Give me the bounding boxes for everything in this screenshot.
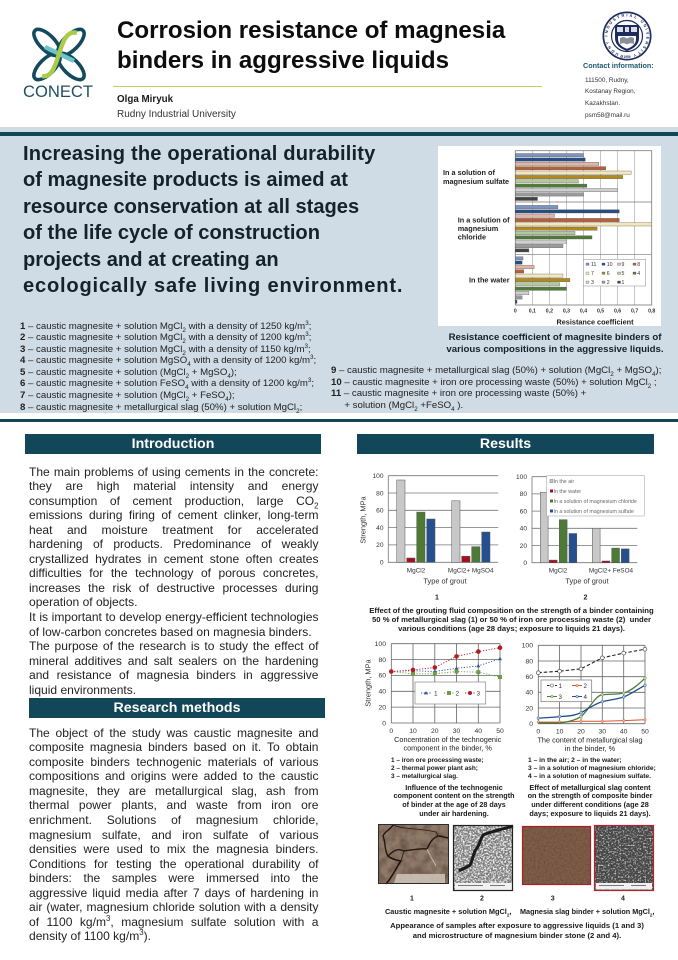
text: research methods: composite binders technogenic materials of various — [29, 755, 318, 769]
text: introduction: mineral additives and salt sealers on the hardening — [29, 654, 318, 668]
composition list 9-11 — [331, 365, 661, 413]
bars: magnesium chloride — [515, 205, 652, 252]
legend — [541, 680, 592, 702]
photo numbers: 3 — [551, 896, 555, 902]
chart legend: 10 — [607, 262, 613, 268]
legend: 2 — [456, 690, 460, 697]
resistance chart caption: Resistance coefficient of magnesite binders of — [449, 332, 661, 343]
text: introduction: heat and moisture treatment for accelerated — [29, 523, 318, 537]
author: Olga Miryuk — [117, 94, 173, 105]
photo 3: slag binder sample — [522, 826, 591, 885]
key statement: projects and at creating an — [23, 249, 279, 271]
chart legend: 3 — [591, 280, 594, 286]
caption: metallurgical slag: days; exposure to liquids 21 days). — [529, 809, 651, 818]
text: introduction: increases the risk of destructive processes during — [29, 581, 318, 595]
chart category labels: magnesium — [458, 224, 499, 233]
legend text: technogenic components — [391, 757, 484, 780]
text: introduction: difficulties for the technology of porous concretes, — [29, 566, 318, 580]
key statement: of the life cycle of construction — [23, 222, 320, 244]
text: introduction: they are high material intensity and energy — [29, 479, 318, 493]
text: introduction: The purpose of the research is to study the effect of — [29, 639, 318, 653]
heading: research methods — [29, 698, 325, 718]
caption: grouting fluid charts: various conditions (age 28 days; exposure to liquids 21 days). — [398, 624, 625, 633]
text: introduction: operation of objects. — [29, 595, 138, 609]
caption: grouting fluid charts: Effect of the grouting fluid composition on the strength of a binder containing — [369, 606, 654, 614]
chart category labels: In the water — [469, 276, 510, 284]
axis labels: 40 — [525, 690, 533, 697]
chart 4: metallurgical slag line chart: 0 — [536, 728, 540, 736]
axis labels: 20 — [376, 542, 384, 549]
text: introduction: of low-carbon concretes based on magnesia binders. — [29, 625, 312, 639]
axis labels: 80 — [520, 491, 527, 498]
panel: resistance coefficient chart — [438, 146, 661, 326]
title underline — [113, 86, 542, 87]
chart 1: strength by grout, slag binder: MgCl2 — [407, 568, 426, 574]
caption: metallurgical slag: on the strength of composite binder — [528, 791, 652, 800]
chart 4: metallurgical slag line chart: The content of metallurgical slag — [537, 736, 643, 744]
chart legend: 9 — [622, 262, 624, 268]
heading: research methods: Research methods — [114, 700, 240, 716]
chart 4: metallurgical slag line chart: 50 — [641, 728, 649, 736]
key statement: resource conservation at all stages — [23, 196, 359, 218]
legend text: conditions: 3 – in a solution of magnesium chloride; — [528, 765, 656, 772]
text: introduction — [29, 464, 318, 697]
chart 4: metallurgical slag line chart: in the binder, % — [565, 744, 616, 753]
title: Corrosion resistance of magnesia — [117, 17, 505, 44]
text: research methods: Conditions for testing the operational durability of — [29, 857, 318, 871]
caption: grouting fluid charts: 50 % of metallurgical slag (1) or 50 % of iron ore processing waste (2) under — [372, 615, 651, 624]
photo numbers: 1 — [410, 896, 414, 902]
axis labels — [522, 643, 533, 728]
text: research methods: aggressive liquid media after 7 days of hardening in — [29, 886, 318, 900]
axis labels: 0 — [380, 560, 384, 567]
chart 2: strength by grout, waste binder: MgCl2+ FeSO4 — [589, 568, 634, 574]
key statement: ecologically safe living environment. — [23, 275, 403, 297]
axis labels: 20 — [378, 704, 386, 711]
caption: metallurgical slag: under different conditions (age 28 — [531, 800, 649, 809]
photo numbers: 4 — [621, 896, 625, 902]
legend: 1 — [558, 683, 562, 690]
axis labels: 60 — [378, 673, 386, 680]
axis labels: 40 — [376, 525, 384, 532]
resistance chart caption — [446, 332, 664, 355]
legend: In a solution of magnesium sulfate — [554, 509, 634, 515]
composition list 9-11: 10 – caustic magnesite + iron ore processing waste (50%) + solution MgCl2 ; — [331, 377, 657, 390]
series 4: magnesium sulfate — [537, 684, 646, 720]
legend: 1 — [434, 690, 438, 697]
legend: In the water — [554, 489, 581, 495]
chart category labels: magnesium sulfate — [443, 177, 509, 186]
chart 3: technogenic component line chart: 30 — [453, 728, 460, 735]
axis labels: 20 — [520, 543, 527, 550]
axis labels: 0 — [382, 720, 386, 727]
chart x axis: 0,3 — [563, 308, 570, 314]
chart 3: technogenic component line chart: Concentration of the technogenic — [394, 735, 502, 744]
affiliation: Rudny Industrial University — [117, 109, 236, 120]
chart x axis title: Resistance coefficient — [556, 318, 634, 326]
text: research methods: enrichment. Solutions of magnesium chloride, — [29, 813, 318, 827]
series 1: iron ore waste — [391, 657, 502, 673]
axis labels: 80 — [376, 490, 384, 497]
contact heading: Contact information: — [583, 61, 654, 70]
chart 4: metallurgical slag line chart — [522, 643, 649, 753]
heading: results: Results — [480, 436, 531, 452]
photo labels: Caustic magnesite + solution MgCl2, — [385, 907, 512, 918]
chart legend: 6 — [607, 271, 610, 277]
key statement: Increasing the operational durability — [23, 143, 375, 165]
axis labels: 60 — [376, 508, 384, 515]
text: research methods: of 1100 kg/m3, magnesium sulfate solution with a — [29, 914, 318, 929]
axis labels: 60 — [520, 508, 527, 515]
chart x axis — [514, 308, 655, 314]
composition list 1-8: 8 – caustic magnesite + metallurgical slag (50%) + solution MgCl2; — [20, 402, 302, 415]
chart 1: strength by grout, slag binder: MgCl2+ MgSO4 — [448, 568, 494, 574]
legend text: conditions: 1 – in the air; 2 – in the water; — [528, 757, 622, 764]
legend: 3 — [476, 690, 480, 697]
axis labels — [372, 473, 384, 567]
axis labels: 0 — [529, 721, 533, 728]
contact details: 111500, Rudny, — [585, 76, 629, 84]
chart 1: strength by grout, slag binder: 1 — [435, 594, 439, 602]
chart 2: strength by grout, waste binder: MgCl2 — [549, 568, 568, 574]
text: introduction: hardening of products. Predominance of weakly — [29, 537, 318, 551]
chart legend — [583, 259, 646, 286]
text: introduction: crystallized hydrates in cement stone often creates — [29, 552, 318, 566]
icon: university seal: 1959 — [623, 55, 631, 59]
bars — [397, 480, 490, 562]
composition list 1-8: 2 – caustic magnesite + solution MgCl2 with a density of 1200 kg/m3; — [20, 331, 311, 345]
title: binders in aggressive liquids — [117, 46, 449, 74]
text: research methods: binders: the samples were immersed into the — [29, 871, 318, 885]
text: research methods: density of 1100 kg/m3). — [29, 928, 151, 943]
legend text: conditions: 4 – in a solution of magnesium sulfate. — [528, 773, 651, 780]
text: research methods: The object of the study was caustic magnesite and — [29, 726, 318, 740]
text: introduction: and resistance of magnesia binders in aggressive — [29, 668, 318, 682]
chart legend: 11 — [591, 262, 596, 268]
heading: introduction — [25, 434, 321, 454]
composition list 1-8: 3 – caustic magnesite + solution MgCl2 with a density of 1150 kg/m3; — [20, 342, 311, 357]
chart 3: technogenic component line chart: 0 — [389, 728, 393, 735]
series 3: slag — [389, 645, 502, 674]
chart 2: strength by grout, waste binder: 2 — [584, 594, 588, 602]
chart legend: 4 — [637, 271, 640, 277]
legend: In the air — [554, 479, 574, 485]
photo 1: cracked sample — [378, 824, 449, 884]
chart category labels: In a solution of — [443, 168, 495, 177]
legend — [415, 682, 486, 704]
chart 4: metallurgical slag line chart: 40 — [620, 728, 628, 736]
chart 3: technogenic component line chart: component in the binder, % — [403, 744, 492, 753]
resistance chart caption: various compositions in the aggressive liquids. — [446, 344, 664, 355]
axis labels: 40 — [378, 689, 386, 696]
photo 4: slag binder micrograph — [594, 825, 654, 891]
legend text: technogenic components: 3 – metallurgical slag. — [391, 773, 458, 780]
axis labels: 80 — [525, 658, 533, 665]
chart 1: strength by grout, slag binder: Strength, MPa — [358, 495, 368, 544]
chart 4: metallurgical slag line chart: 30 — [599, 728, 606, 736]
composition list 1-8: 4 – caustic magnesite + solution MgSO4 with a density of 1200 kg/m3; — [20, 354, 316, 368]
title — [117, 17, 506, 74]
axis labels: 100 — [375, 641, 386, 648]
chart 1: strength by grout, slag binder: Type of grout — [423, 576, 467, 586]
key statement — [23, 143, 403, 297]
chart 4: metallurgical slag line chart: 10 — [556, 728, 564, 736]
text: introduction: The main problems of using cements in the concrete: — [29, 464, 318, 478]
text: research methods: air (water, magnesium chloride solution with a density — [29, 900, 318, 914]
axis labels: 100 — [516, 474, 527, 481]
contact details: Kazakhstan. — [585, 100, 620, 107]
bars: water — [515, 257, 570, 303]
text: introduction: consumption of cement production, large CO2 — [29, 494, 318, 510]
chart 3: technogenic component line chart: 50 — [496, 728, 504, 735]
caption: photos: Appearance of samples after exposure to aggressive liquids (1 and 3) — [390, 921, 644, 930]
caption: metallurgical slag — [528, 782, 652, 818]
text: introduction: liquid environments. — [29, 683, 136, 697]
photo numbers — [410, 896, 625, 902]
chart 3: technogenic component line chart: 10 — [409, 728, 417, 735]
contact details — [585, 76, 635, 119]
caption: grouting fluid charts — [369, 606, 654, 633]
chart legend: 1 — [622, 280, 624, 286]
photo 2: micrograph with crack — [453, 825, 513, 891]
icon: CONECT logo: CONECT — [23, 82, 93, 101]
text: introduction: It is important to develop energy-efficient technologies — [29, 610, 318, 624]
band: header background — [0, 127, 678, 413]
series 2: in water — [537, 718, 646, 723]
key statement: of magnesite products is aimed at — [23, 169, 348, 191]
chart x axis: 0,1 — [529, 308, 536, 314]
legend text: technogenic components: 1 – iron ore processing waste; — [391, 757, 484, 764]
bars: magnesium sulfate — [515, 154, 631, 200]
chart legend: 8 — [637, 262, 640, 268]
chart 3: technogenic component line chart: 40 — [475, 728, 482, 735]
caption: metallurgical slag: Effect of metallurgical slag content — [529, 782, 651, 792]
chart category labels: chloride — [458, 232, 486, 242]
text: research methods: magnesium sulfate, and iron sulfate of various — [29, 828, 318, 842]
text: research methods: densities were used to mix the magnesia binders. — [29, 842, 318, 856]
series 2: ash — [391, 670, 502, 679]
axis labels: 0 — [523, 560, 527, 567]
composition list 1-8: 5 – caustic magnesite + solution (MgCl2 + MgSO4); — [20, 367, 237, 380]
axis labels: 40 — [520, 526, 527, 533]
caption: technogenic component: under air hardening. — [419, 809, 489, 818]
chart legend: 2 — [607, 280, 610, 286]
chart x axis: 0,5 — [597, 308, 604, 314]
icon: CONECT logo — [23, 25, 93, 101]
composition list 9-11: + solution (MgCl2 +FeSO4 ). — [344, 400, 463, 413]
chart category labels — [443, 168, 510, 284]
axis labels: 100 — [522, 643, 533, 650]
icon: university seal: RUDNY INDUSTRIAL UNIVERSITY — [604, 14, 650, 58]
legend: 3 — [558, 694, 562, 701]
chart 2: strength by grout, waste binder: Type of grout — [565, 576, 609, 586]
chart legend: 5 — [622, 271, 624, 277]
chart 3: technogenic component line chart: Strength, MPa — [364, 658, 372, 707]
axis labels: 80 — [378, 657, 386, 664]
divider band bottom — [0, 419, 678, 422]
chart 3: technogenic component line chart: 20 — [431, 728, 439, 735]
text: introduction: emissions during firing of cement clinker, long-term — [29, 508, 318, 522]
axis labels: 60 — [525, 674, 533, 681]
text: research methods: magnesite, they are metallurgical slag, ash from — [29, 784, 318, 798]
series 1: in air — [536, 647, 647, 675]
text: research methods: compositions and origins were added to the caustic — [29, 769, 318, 783]
chart x axis: 0,6 — [614, 308, 621, 314]
caption: technogenic component: Influence of the technogenic — [405, 782, 503, 792]
axis labels: 20 — [525, 705, 533, 712]
axis labels — [375, 641, 386, 727]
legend: 4 — [584, 694, 588, 701]
caption: photos — [390, 921, 644, 940]
heading: results — [357, 434, 654, 454]
composition list 1-8: 7 – caustic magnesite + solution (MgCl2 + FeSO4); — [20, 390, 235, 403]
caption: photos: and microstructure of magnesium binder stone (2 and 4). — [413, 931, 621, 940]
legend text: conditions — [528, 757, 656, 780]
chart 3: technogenic component line chart — [364, 641, 504, 753]
composition list 9-11: 11 – caustic magnesite + iron ore processing waste (50%) + — [331, 388, 586, 399]
legend — [547, 476, 644, 516]
axis labels: 100 — [372, 473, 384, 480]
chart x axis: 0,4 — [580, 308, 587, 314]
composition list 1-8: 1 – caustic magnesite + solution MgCl2 with a density of 1250 kg/m3; — [20, 319, 311, 333]
chart x axis: 0,7 — [631, 308, 638, 314]
chart legend: 7 — [591, 271, 594, 277]
composition list 1-8: 6 – caustic magnesite + solution FeSO4 with a density of 1200 kg/m3; — [20, 377, 314, 391]
series 3: magnesium chloride — [538, 677, 646, 723]
composition list 9-11: 9 – caustic magnesite + metallurgical slag (50%) + solution (MgCl2 + MgSO4); — [331, 365, 661, 378]
chart x axis: 0,8 — [648, 308, 655, 314]
caption: technogenic component: component content on the strength — [394, 791, 514, 800]
contact details: Kostanay Region, — [585, 88, 635, 95]
chart x axis: 0,2 — [546, 308, 553, 314]
chart 1: strength by grout, slag binder — [358, 473, 498, 602]
chart 2: strength by grout, waste binder — [516, 474, 644, 602]
axis labels — [516, 474, 527, 567]
text: research methods — [29, 726, 318, 943]
text: research methods: thermal power plants, and waste from iron ore — [29, 798, 318, 812]
divider band top — [0, 132, 678, 136]
composition list 1-8 — [20, 319, 316, 415]
legend: 2 — [584, 683, 588, 690]
contact details: psm58@mail.ru — [585, 112, 630, 119]
text: research methods: composite magnesia binders based on it. To obtain — [29, 740, 318, 754]
caption: technogenic component: of binder at the age of 28 days — [402, 800, 506, 809]
caption: technogenic component — [394, 782, 514, 818]
chart category labels: In a solution of — [458, 216, 510, 224]
photo labels right: Magnesia slag binder + solution MgCl2, — [520, 907, 655, 917]
legend text: technogenic components: 2 – thermal power plant ash; — [391, 765, 478, 772]
chart 4: metallurgical slag line chart: 20 — [577, 728, 585, 736]
heading: introduction: Introduction — [132, 436, 214, 452]
photo numbers: 2 — [480, 896, 484, 902]
chart x axis: 0 — [514, 308, 517, 314]
bars — [540, 492, 629, 563]
legend: In a solution of magnesium chloride — [554, 499, 637, 505]
